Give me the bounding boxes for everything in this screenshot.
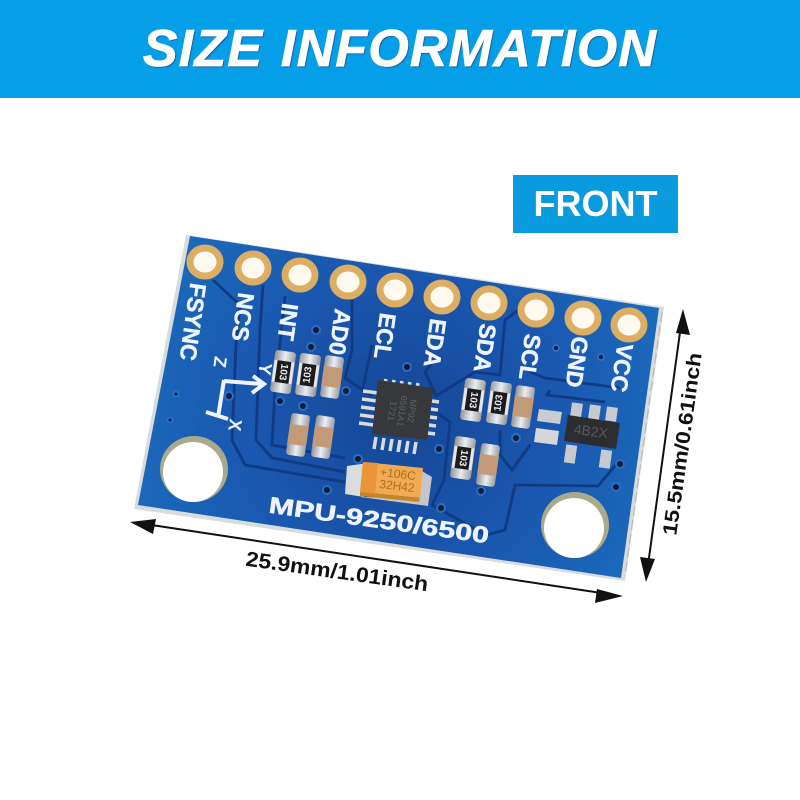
pin labels: AD0 bbox=[324, 307, 356, 357]
front label: FRONT bbox=[534, 183, 657, 224]
front label bbox=[513, 175, 678, 233]
processor chip: 6591A1 bbox=[395, 395, 409, 427]
pin labels: ECL bbox=[369, 311, 401, 361]
header pads bbox=[190, 248, 644, 339]
board name: MPU-9250/6500 bbox=[267, 492, 491, 548]
voltage regulator: 4B2X bbox=[573, 421, 610, 441]
mounting hole right bbox=[541, 492, 609, 558]
tantalum capacitor: 32H42 bbox=[379, 477, 416, 495]
axis marker: Z bbox=[209, 355, 231, 369]
pin labels: SDA bbox=[469, 322, 501, 374]
pin labels: EDA bbox=[419, 317, 451, 369]
width label: 25.9mm/1.01inch bbox=[244, 548, 430, 596]
pin labels: FSYNC bbox=[175, 282, 211, 362]
axis marker bbox=[206, 355, 276, 432]
voltage regulator bbox=[564, 402, 620, 469]
vias bbox=[168, 326, 624, 512]
height dimension arrow bbox=[640, 309, 690, 582]
tantalum capacitor: +106C bbox=[379, 465, 417, 483]
pin labels: GND bbox=[561, 335, 593, 389]
axis marker: Y bbox=[254, 362, 276, 376]
pin labels: SCL bbox=[514, 332, 546, 382]
traces bbox=[213, 280, 620, 535]
pin labels: NCS bbox=[227, 291, 259, 343]
title: SIZE INFORMATION bbox=[143, 20, 657, 78]
circuit board bbox=[134, 235, 664, 581]
height label: 15.5mm/0.61inch bbox=[659, 351, 707, 537]
width dimension arrow bbox=[130, 519, 623, 603]
processor chip: MP92 bbox=[405, 399, 419, 423]
pin labels: VCC bbox=[606, 342, 638, 394]
axis marker: X bbox=[224, 418, 246, 432]
header banner bbox=[0, 0, 800, 98]
passive components bbox=[270, 350, 562, 487]
tantalum capacitor bbox=[345, 462, 432, 506]
processor chip bbox=[359, 379, 439, 454]
pin labels bbox=[175, 282, 638, 394]
mounting hole left bbox=[160, 436, 228, 502]
processor chip: 1721 bbox=[386, 400, 398, 422]
pin labels: INT bbox=[273, 302, 303, 342]
